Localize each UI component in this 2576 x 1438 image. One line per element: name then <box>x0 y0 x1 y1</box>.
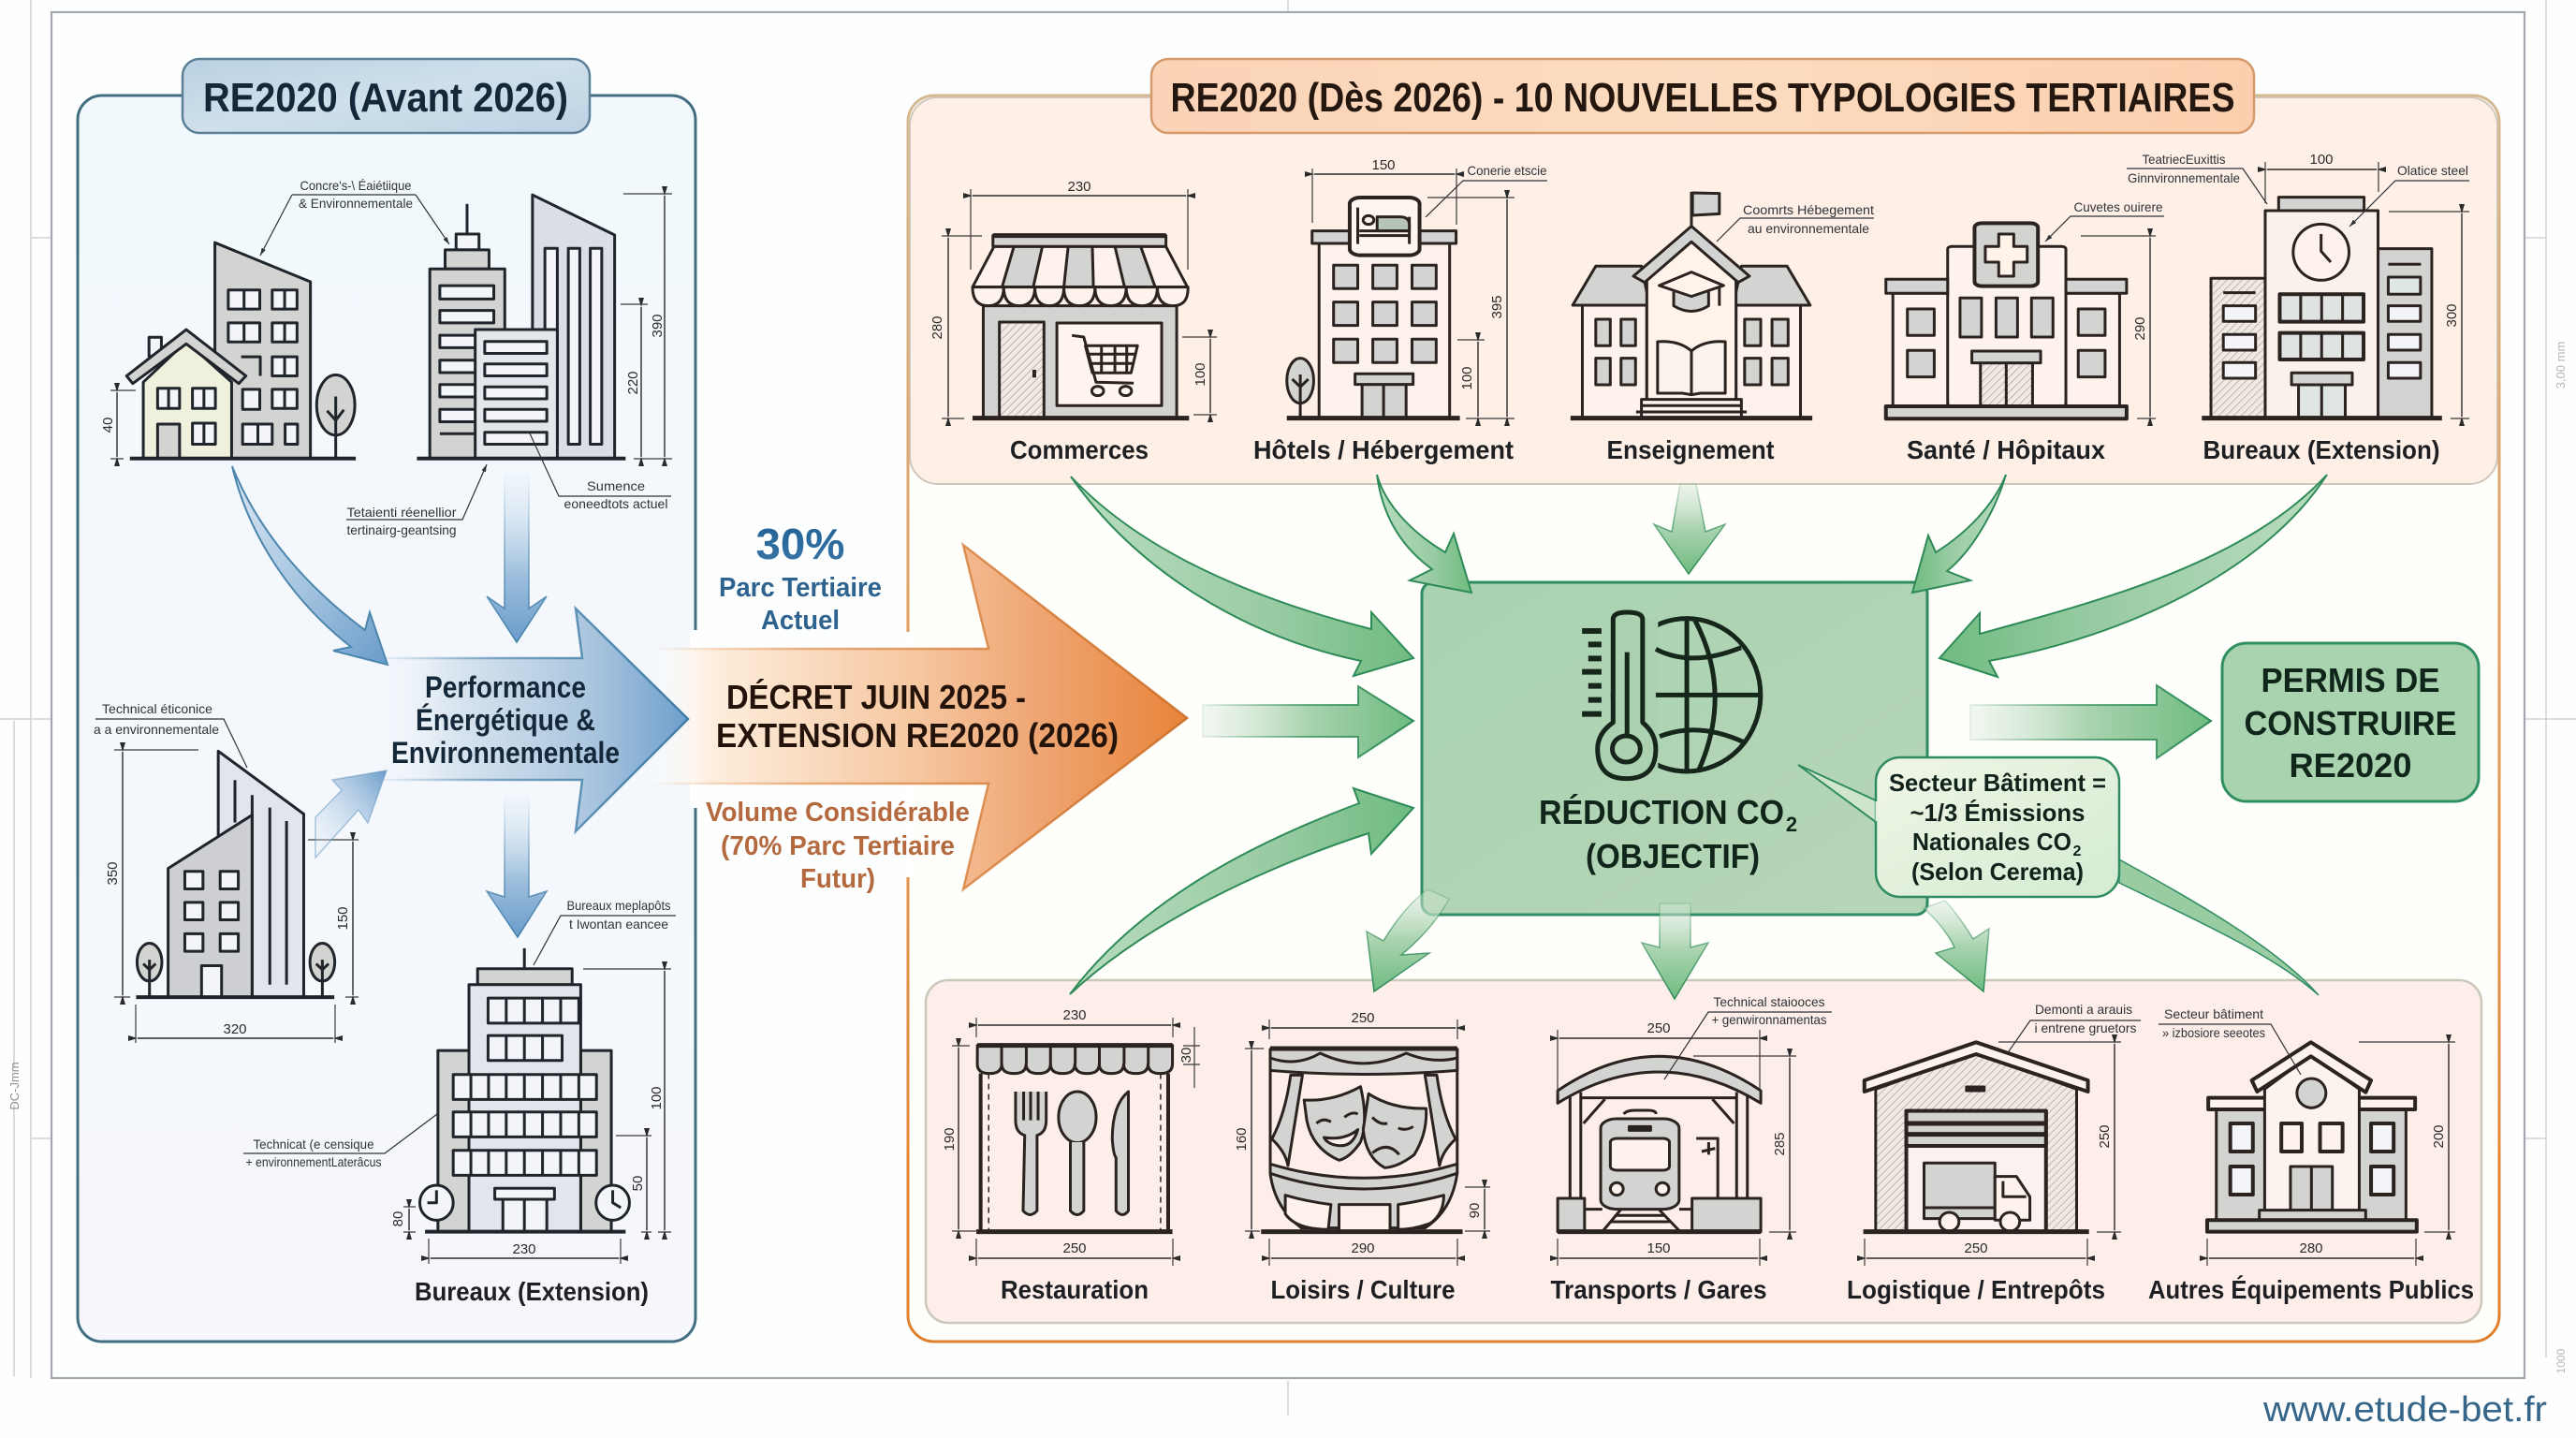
callout: secteur batiment: ~1/3 Émissions <box>1910 799 2086 827</box>
typology: loisirs culture: 160 <box>1234 1127 1250 1152</box>
callout: secteur batiment: Secteur Bâtiment = <box>1889 769 2106 797</box>
arrow: blue up right from mid-rise <box>315 770 387 858</box>
label: loisirs culture: Loisirs / Culture <box>1271 1275 1455 1304</box>
stat: 30 percent parc tertiaire actuel: Parc Tertiaire <box>719 573 882 603</box>
building: house and tower <box>100 242 356 459</box>
building: bureaux extension: 100 <box>649 1086 665 1110</box>
annotation: technical callout mid-rise: a a environnementale <box>94 722 219 737</box>
callout: secteur batiment: Nationales CO <box>1912 828 2071 856</box>
typology: restauration <box>942 1007 1200 1304</box>
stat: volume considerable 70 percent <box>706 798 970 894</box>
typology: autres equipements publics: 280 <box>2299 1240 2323 1256</box>
typology: bureaux extension: Ginnvironnementale <box>2128 170 2240 185</box>
building: bureaux extension <box>390 948 671 1306</box>
annotation: bureaux top callout: t Iwontan eancee <box>569 917 668 932</box>
annotation: bureaux side callout <box>243 1114 437 1169</box>
arrow: blue down from towers <box>487 473 547 642</box>
annotation: surface callout <box>530 433 671 511</box>
typology: logistique entrepots: i entrene gruetors <box>2035 1020 2136 1035</box>
annotation: technical callout mid-rise <box>94 701 247 768</box>
annotation: concrete callouts building top <box>260 178 449 256</box>
callout: secteur batiment <box>1798 757 2119 897</box>
building: commercial towers <box>417 194 672 459</box>
typology: hotels: Conerie etscie <box>1468 163 1547 178</box>
callout: secteur batiment: (Selon Cerema) <box>1911 858 2084 886</box>
title: avant 2026 <box>183 59 590 133</box>
stat: volume considerable 70 percent: Volume Considérable <box>706 798 970 828</box>
arrow: performance energetique et environnementale: Énergétique & <box>416 703 595 737</box>
arrow: commerces to CO2 <box>1071 477 1413 676</box>
label: restauration: Restauration <box>1001 1275 1149 1304</box>
typology: hotels: 395 <box>1489 295 1505 319</box>
arrow: decret juin 2025 extension: DÉCRET JUIN 2025 - <box>726 678 1026 716</box>
arrow: CO2 to permis <box>1970 685 2211 758</box>
label: logistique entrepots: Logistique / Entrepôts <box>1847 1275 2105 1304</box>
typology: transports gares <box>1550 994 1832 1304</box>
typology: commerces: 280 <box>929 315 945 340</box>
arrow: performance energetique et environnementale: Performance <box>425 670 586 704</box>
arrow: callout to autres equipements <box>2119 859 2319 995</box>
arrow: decree to CO2 <box>1203 686 1413 757</box>
label: enseignement: Enseignement <box>1606 435 1775 464</box>
typology: transports gares: 285 <box>1772 1132 1788 1156</box>
typology: transports gares: Technical staiooces <box>1713 994 1825 1009</box>
typology: autres equipements publics: 200 <box>2431 1124 2447 1149</box>
panel: top typologies band <box>910 97 2497 484</box>
annotation: tertiary callout: tertinairg-geantsing <box>346 522 457 537</box>
annotation: technical callout mid-rise: Technical éticonice <box>102 701 212 716</box>
annotation: bureaux top callout <box>534 898 676 965</box>
typology: logistique entrepots: 250 <box>1964 1240 1988 1256</box>
annotation: surface callout: eoneedtots actuel <box>564 496 668 511</box>
typology: autres equipements publics: Secteur bâtiment <box>2164 1006 2263 1021</box>
box: permis de construire: CONSTRUIRE <box>2245 704 2456 742</box>
building: commercial towers: 220 <box>625 371 641 395</box>
arrow: hotels to CO2 <box>1377 475 1471 593</box>
stat: 30 percent parc tertiaire actuel <box>719 520 882 636</box>
box: permis de construire: PERMIS DE <box>2261 661 2439 699</box>
box: reduction CO2 objectif <box>1422 582 1927 915</box>
label: bureaux extension: Bureaux (Extension) <box>2203 435 2439 464</box>
typology: restauration: 250 <box>1062 1240 1087 1256</box>
typology: bureaux extension: TeatriecEuxittis <box>2142 152 2226 167</box>
arrow: performance energetique et environnementale <box>370 609 688 831</box>
typology: bureaux extension: 300 <box>2444 303 2460 328</box>
typology: commerces: 230 <box>1067 179 1091 195</box>
annotation: surface callout: Sumence <box>587 478 645 493</box>
title: des 2026 <box>1151 59 2254 133</box>
typology: enseignement <box>1571 192 1874 464</box>
annotation: bureaux side callout: + environnementLaterâcus <box>245 1154 382 1169</box>
building: bureaux extension: 50 <box>630 1176 646 1191</box>
arrow: blue down to bureaux <box>487 795 547 937</box>
arrow: sante to CO2 <box>1912 475 2006 593</box>
box: permis de construire: RE2020 <box>2290 746 2411 785</box>
label: transports gares: Transports / Gares <box>1550 1275 1767 1304</box>
typology: commerces: 100 <box>1193 362 1208 387</box>
arrow: decret juin 2025 extension <box>646 545 1187 889</box>
annotation: tertiary callout <box>346 464 487 537</box>
typology: restauration: 230 <box>1062 1007 1087 1023</box>
building: mid-rise with trees: 320 <box>223 1021 247 1037</box>
building: bureaux extension: 230 <box>512 1241 536 1257</box>
typology: loisirs culture: 90 <box>1467 1203 1483 1218</box>
typology: transports gares: + genwironnamentas <box>1711 1012 1827 1027</box>
typology: logistique entrepots: Demonti a arauis <box>2035 1002 2132 1017</box>
text: reduction CO2: RÉDUCTION CO <box>1539 793 1784 831</box>
text: 1000 <box>2554 1348 2568 1373</box>
typology: commerces <box>929 179 1217 464</box>
typology: loisirs culture: 250 <box>1351 1010 1375 1026</box>
label: hotels: Hôtels / Hébergement <box>1253 435 1514 464</box>
typology: bureaux extension <box>2127 152 2469 464</box>
typology: bureaux extension: 100 <box>2309 152 2334 168</box>
arrow: restauration to CO2 <box>1070 788 1413 994</box>
callout: secteur batiment: 2 <box>2073 844 2082 859</box>
label: commerces: Commerces <box>1010 435 1149 464</box>
annotation: bureaux side callout: Technicat (e censique <box>253 1137 374 1152</box>
typology: loisirs culture: 290 <box>1351 1240 1375 1256</box>
arrow: CO2 to loisirs <box>1367 889 1449 991</box>
arrow: bureaux to CO2 <box>1939 475 2327 677</box>
panel: RE2020 avant 2026 <box>78 59 699 1342</box>
typology: transports gares: 150 <box>1647 1240 1671 1256</box>
typology: enseignement: au environnementale <box>1748 221 1869 236</box>
stat: 30 percent parc tertiaire actuel: 30% <box>756 520 844 568</box>
typology: bureaux extension: Olatice steel <box>2397 163 2468 178</box>
icon: thermometer and globe <box>1582 612 1761 779</box>
footer: website: www.etude-bet.fr <box>2262 1390 2547 1430</box>
typology: hotels: 100 <box>1459 366 1475 390</box>
label: bureaux extension: Bureaux (Extension) <box>415 1277 649 1306</box>
arrow: CO2 to transports <box>1642 903 1708 999</box>
label: autres equipements publics: Autres Équipements Publics <box>2148 1275 2474 1304</box>
building: mid-rise with trees: 150 <box>335 906 351 931</box>
typology: logistique entrepots: 250 <box>2097 1124 2113 1149</box>
box: permis de construire <box>2222 643 2479 801</box>
typology: hotels: 150 <box>1371 157 1396 173</box>
typology: sante <box>1886 199 2164 464</box>
building: mid-rise with trees <box>105 750 359 1043</box>
typology: sante: Cuvetes ouirere <box>2074 199 2163 214</box>
text: reduction CO2 <box>1539 793 1797 875</box>
label: sante: Santé / Hôpitaux <box>1907 435 2105 464</box>
building: house and tower: 40 <box>100 418 116 433</box>
typology: loisirs culture <box>1234 1010 1490 1304</box>
annotation: concrete callouts building top: & Environnementale <box>299 196 413 211</box>
panel: RE2020 des 2026 <box>903 59 2499 1342</box>
typology: restauration: 190 <box>942 1127 958 1152</box>
stat: volume considerable 70 percent: (70% Parc Tertiaire <box>721 831 955 861</box>
building: mid-rise with trees: 350 <box>105 861 121 886</box>
title: des 2026: RE2020 (Dès 2026) - 10 NOUVELLES TYPOLOGIES TERTIAIRES <box>1170 75 2235 121</box>
typology: enseignement: Coomrts Hébegement <box>1743 202 1874 217</box>
arrow: CO2 to logistique <box>1924 901 1989 991</box>
annotation: tertiary callout: Tetaienti réenellior <box>346 505 457 520</box>
panel: bottom typologies band <box>926 980 2481 1323</box>
typology: sante: 290 <box>2132 316 2148 341</box>
text: reduction CO2: 2 <box>1786 813 1797 836</box>
text: DC-Jmm <box>7 1062 22 1110</box>
text: reduction CO2: (OBJECTIF) <box>1586 837 1760 875</box>
typology: logistique entrepots <box>1847 1002 2141 1304</box>
stat: 30 percent parc tertiaire actuel: Actuel <box>761 606 840 636</box>
text: 3,00 mm <box>2554 342 2568 389</box>
arrow: performance energetique et environnementale: Environnementale <box>391 736 620 770</box>
arrow: enseignement to CO2 <box>1654 484 1725 574</box>
typology: restauration: 30 <box>1178 1048 1194 1063</box>
arrow: blue curved from top buildings <box>232 466 388 665</box>
typology: transports gares: 250 <box>1647 1020 1671 1036</box>
building: commercial towers: 390 <box>650 314 666 338</box>
stat: volume considerable 70 percent: Futur) <box>800 864 875 894</box>
building: bureaux extension: 80 <box>390 1211 406 1226</box>
typology: autres equipements publics <box>2148 1006 2474 1304</box>
typology: autres equipements publics: » izbosiore seeotes <box>2162 1025 2265 1040</box>
arrow: decret juin 2025 extension: EXTENSION RE2020 (2026) <box>716 716 1119 755</box>
typology: hotels <box>1253 157 1547 464</box>
annotation: concrete callouts building top: Concre's-\ Éaiétiique <box>300 178 412 193</box>
title: avant 2026: RE2020 (Avant 2026) <box>203 75 568 121</box>
annotation: bureaux top callout: Bureaux meplapôts <box>567 898 670 913</box>
